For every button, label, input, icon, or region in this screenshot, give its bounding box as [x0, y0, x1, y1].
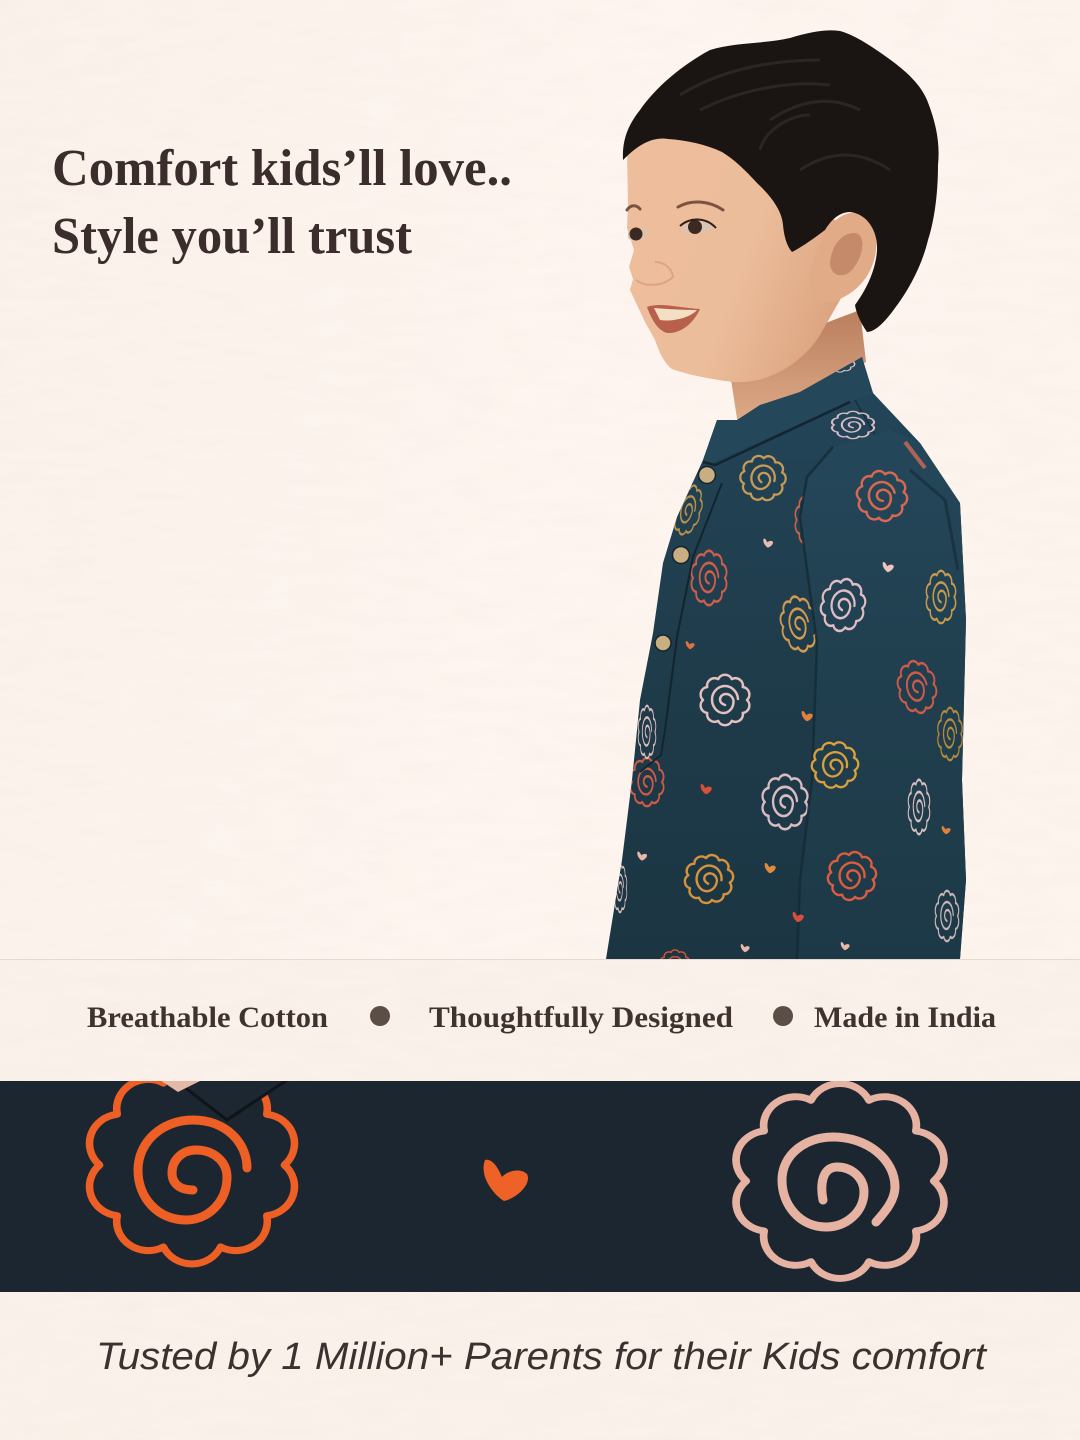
kurta print on body — [613, 449, 825, 980]
kurta — [600, 350, 980, 980]
collar — [703, 357, 873, 463]
title: Comfort kids’ll love.. — [52, 140, 512, 197]
benefits strip — [87, 1001, 996, 1034]
smile — [647, 305, 700, 333]
separator dot — [773, 1006, 793, 1026]
boy in navy printed kurta — [600, 30, 980, 980]
fabric close-up band — [0, 1066, 1080, 1292]
tagline: Tusted by 1 Million+ Parents for their Kids comfort — [96, 1336, 988, 1378]
separator dot — [370, 1006, 390, 1026]
kurta buttons — [655, 466, 716, 651]
brows and eyes — [627, 202, 723, 241]
sleeve — [797, 430, 975, 959]
benefit: thoughtfully designed: Thoughtfully Designed — [429, 1001, 733, 1034]
orange flower motif — [89, 1066, 295, 1264]
face — [627, 125, 870, 382]
title — [52, 140, 512, 265]
hair — [623, 30, 939, 332]
divider line — [0, 959, 1080, 960]
ear — [810, 213, 876, 302]
kurta print on sleeve — [807, 467, 962, 941]
pink flower motif — [736, 1084, 944, 1278]
benefit: breathable cotton: Breathable Cotton — [87, 1001, 328, 1034]
placket stitching — [184, 1081, 288, 1122]
title: Style you’ll trust — [52, 208, 413, 265]
orange heart — [484, 1160, 528, 1201]
placket — [640, 483, 722, 772]
benefit: made in india: Made in India — [814, 1001, 996, 1034]
neck — [728, 310, 866, 425]
